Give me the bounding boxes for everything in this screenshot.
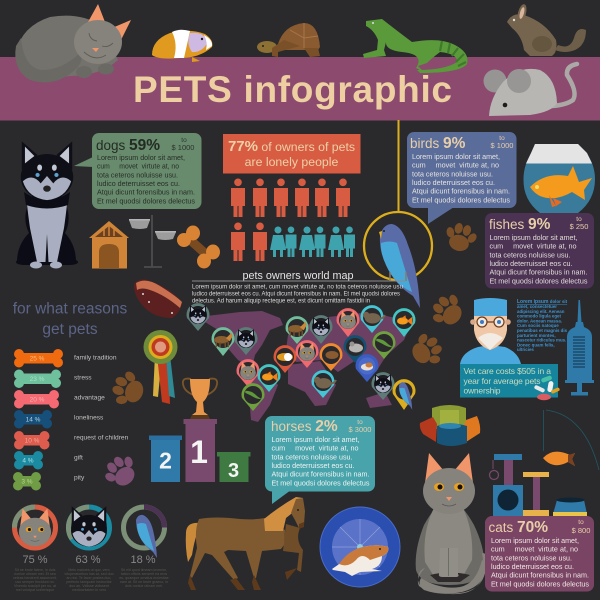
bone labels <box>74 354 129 482</box>
pin: dog <box>187 303 210 331</box>
birds text: cum movet virtute at, no <box>412 163 499 170</box>
cats text: Atqui dicunt forensibus in nam. <box>491 573 589 580</box>
birds text: Atqui dicunt forensibus in nam. <box>412 189 510 196</box>
bone labels: stress <box>74 374 92 382</box>
podium place 1: 1 <box>190 434 208 470</box>
dogs text <box>97 155 196 205</box>
donut captions: duo an. Vidisse vidissent <box>69 584 109 588</box>
birds text: Et mel quodsi dolores delectus <box>412 197 511 204</box>
label: 75 % <box>22 554 48 566</box>
pin: fish <box>393 308 416 337</box>
dogs text: Lorem ipsum dolor sit amet, <box>97 155 185 162</box>
cats text: ludico deterruisset eos cu. <box>491 564 574 571</box>
callout: vet care costs: year for average pets <box>464 376 540 386</box>
donut captions: Meis maiores ut quo, vero <box>68 568 110 572</box>
label: 18 % <box>130 554 156 566</box>
horses text: tota ceteros noluisse usu. <box>272 454 353 461</box>
panel: horses <box>265 416 375 504</box>
fishes text <box>490 235 588 285</box>
vet small text: parturient montes, <box>517 333 556 338</box>
bone 14% <box>14 410 52 428</box>
fishes price: to <box>576 216 582 223</box>
icon: plum paw print <box>98 449 144 494</box>
birds text: ludico deterruisset eos cu. <box>412 180 495 187</box>
bone 23% <box>14 370 61 388</box>
icon: rosette <box>144 330 178 404</box>
pin: guinea pig <box>274 345 296 373</box>
donut captions: mediocritatem in vero <box>72 588 106 592</box>
pin: cat <box>296 340 318 368</box>
fishes text: Atqui dicunt forensibus in nam. <box>490 270 588 277</box>
pin: bird <box>393 379 416 410</box>
donut captions: Sit ne brute fatem, in duis <box>15 568 56 572</box>
donut captions: mel volutpat scelerisque <box>16 588 54 592</box>
birds text: Lorem ipsum dolor sit amet, <box>412 154 500 161</box>
dogs heading: dogs 59% <box>96 137 160 154</box>
vet small text: nascetur ridiculus mus. <box>517 338 566 343</box>
icon: trophy <box>183 379 217 419</box>
map description text: Lorem ipsum dolor sit amet, cum movet virtute at, no tota ceteros noluisse usu <box>192 284 403 290</box>
icon: horse <box>186 497 305 590</box>
heading: for what reasons get pets: for what reasons <box>13 300 128 318</box>
cats text: cum movet virtute at, no <box>491 547 578 554</box>
icon: fish toy on rod <box>543 410 599 470</box>
icon: bone treat <box>177 226 220 268</box>
panel: birds <box>407 132 516 224</box>
callout: 77% lonely people: 77% of owners of pets <box>228 138 355 155</box>
pin: dog <box>234 327 258 355</box>
bone labels: family tradition <box>74 354 117 362</box>
bar chart: reasons bones <box>13 349 63 490</box>
icon: collar <box>134 280 182 318</box>
pin: mouse <box>344 335 366 363</box>
horses price: to <box>357 419 363 426</box>
donut captions: perfecto tamquam instructior <box>66 580 113 584</box>
pin: dog <box>372 372 394 400</box>
pictogram: owners <box>231 178 355 261</box>
icon: fish bowl <box>523 144 595 213</box>
bone 14%: 14 % <box>26 416 41 424</box>
pin: chinchilla <box>361 305 385 333</box>
cats text: tota ceteros noluisse usu. <box>491 555 572 562</box>
vet small text: Lorem ipsum dolor sit <box>517 299 568 305</box>
pin: iguana <box>373 331 395 359</box>
cats text: Lorem ipsum dolor sit amet, <box>491 538 579 545</box>
heading: for what reasons get pets <box>13 300 128 338</box>
fishes price value: $ 250 <box>570 222 588 231</box>
label: 63 % <box>75 554 101 566</box>
heading: pets owners world map: pets owners world map <box>242 270 354 282</box>
icon: bowls on stand <box>129 215 176 267</box>
dogs price: to <box>181 137 187 144</box>
donut: birds 18% <box>124 507 164 566</box>
pin: cat <box>236 359 260 387</box>
bone 3%: 3 % <box>21 478 33 486</box>
cats heading: cats 70% <box>488 519 548 536</box>
pin: horse <box>286 316 308 344</box>
birds price value: $ 1000 <box>491 141 513 150</box>
icon: husky dog <box>16 141 78 268</box>
vet small text <box>517 299 568 352</box>
horses text <box>272 437 370 487</box>
fishes text: Lorem ipsum dolor sit amet, <box>490 235 578 242</box>
icon: turtle <box>257 23 320 57</box>
title banner <box>0 57 600 120</box>
donut captions: usu semper tincidunt no. <box>15 580 55 584</box>
icon: paw prints <box>108 220 481 412</box>
donut captions: Sit elit quod timeam invenire, <box>121 568 167 572</box>
dogs text: cum movet virtute at, no <box>97 164 179 171</box>
donut captions <box>13 568 169 592</box>
horses text: Et mel quodsi dolores delectus <box>272 480 370 487</box>
map description text <box>192 284 403 304</box>
icon: cat tree <box>490 454 549 516</box>
hamster <box>332 545 388 576</box>
bone 25%: 25 % <box>30 356 45 362</box>
callout: vet care costs: Vet care costs $505 in a <box>464 366 551 376</box>
title: PETS infographic <box>133 69 452 110</box>
icon: iguana <box>363 19 468 73</box>
vet small text: penatibus et magnis dis <box>517 328 568 333</box>
birds text <box>412 154 511 204</box>
bone 10%: 10 % <box>25 438 40 444</box>
cats text <box>491 538 590 588</box>
bone labels: gift <box>74 454 83 462</box>
donut captions: veleas hendrerit assueverit, <box>13 576 57 580</box>
heading: for what reasons get pets: get pets <box>42 321 98 338</box>
map pins <box>187 303 416 411</box>
pin: horse <box>212 327 234 356</box>
bone 10% <box>14 431 50 450</box>
donut captions: nonlue utinam mei. Et sea <box>14 572 56 576</box>
dogs text: Et mel quodsi dolores delectus <box>97 198 196 205</box>
dogs text: Atqui dicunt forensibus in nam. <box>97 190 195 197</box>
bone labels: loneliness <box>74 414 104 422</box>
icon: dog house <box>89 221 129 268</box>
map description text: delectus. Ad harum aliquip recteque est, est dicunt omittam fastidii in <box>192 298 370 304</box>
vet small text: Cum sociis natoque <box>517 323 559 328</box>
donut captions: vituperatoribus has at, sed duo <box>64 572 114 576</box>
icon: pills <box>534 375 560 400</box>
icon: sitting cat <box>416 453 487 594</box>
icon: mouse <box>484 64 577 116</box>
cats text: Et mel quodsi dolores delectus <box>491 581 590 588</box>
fishes heading: fishes 9% <box>489 216 551 233</box>
bone 4% <box>14 451 43 470</box>
dogs price value: $ 1000 <box>172 143 194 152</box>
icon: sleeping cat <box>15 4 131 82</box>
pin: hamster <box>356 354 379 382</box>
horses text: Lorem ipsum dolor sit amet, <box>272 437 360 444</box>
birds price: to <box>499 135 505 142</box>
donut captions: an nisi. Te facer postea duo, <box>67 576 111 580</box>
bone 23%: 23 % <box>30 376 45 383</box>
fishes text: cum movet virtute at, no <box>490 244 577 251</box>
horses text: ludico deterruisset eos cu. <box>272 463 355 470</box>
pin: chinchilla <box>311 370 336 398</box>
map description text: ludico deterruisset eos cu. Atqui dicunt forensibus in nam. Et mel quodsi dolores <box>192 290 401 298</box>
donut captions: duis nonlue utinam mei. <box>125 584 163 588</box>
icon: cat bowl <box>553 498 587 516</box>
icon: chinchilla <box>507 3 586 56</box>
cats price value: $ 800 <box>572 526 590 535</box>
callout: vet care costs <box>460 364 558 398</box>
bone 20% <box>14 390 59 408</box>
icon: food toy <box>420 405 480 446</box>
panel: dogs <box>74 133 202 209</box>
bone labels: request of children <box>74 434 129 442</box>
vet small text: adipiscing elit. Aenean <box>517 309 565 314</box>
bone 3% <box>13 472 41 490</box>
vet small text: Donec quam felis, <box>517 342 555 347</box>
panel: cats <box>485 516 594 592</box>
donut captions: nam at. Sit ne brute graeco, in <box>120 580 168 584</box>
birds text: tota ceteros noluisse usu. <box>412 171 493 178</box>
donut captions: Vivendo suscipit per no, at <box>14 584 56 588</box>
horses text: Atqui dicunt forensibus in nam. <box>272 472 370 479</box>
fishes text: tota ceteros noluisse usu. <box>490 252 571 259</box>
pin: turtle <box>320 343 342 371</box>
pin: fish <box>258 364 280 392</box>
bone 4%: 4 % <box>22 458 34 464</box>
cats price: to <box>578 519 584 526</box>
donut: cats 75% <box>14 507 56 566</box>
bone 25% <box>14 349 63 368</box>
callout: 77% lonely people <box>223 134 360 174</box>
pin: dog <box>310 315 332 344</box>
vet small text: ultricies <box>517 347 534 352</box>
donut: dogs 63% <box>68 506 110 566</box>
podium <box>149 419 250 482</box>
vet small text: commodo ligula eget <box>517 314 561 319</box>
bone labels: advantage <box>74 394 105 402</box>
bone 20%: 20 % <box>30 396 45 404</box>
icon: budgie <box>379 224 420 308</box>
birds heading: birds 9% <box>410 135 466 152</box>
icon: veterinarian <box>460 298 521 364</box>
fishes text: Et mel quodsi dolores delectus <box>490 278 588 285</box>
dogs text: tota ceteros noluisse usu. <box>97 172 178 179</box>
vet small text: amet, consectetuer <box>517 304 557 309</box>
panel: fishes <box>485 213 594 288</box>
fishes text: ludico deterruisset eos cu. <box>490 261 573 268</box>
world map <box>190 311 412 422</box>
horses text: cum movet virtute at, no <box>272 446 359 453</box>
icon: syringe <box>565 300 594 396</box>
horses heading: horses 2% <box>271 418 338 435</box>
bird pointer line and ring <box>364 120 432 280</box>
podium place 2: 2 <box>159 448 172 474</box>
pin: cat <box>336 308 360 337</box>
callout: 77% lonely people: are lonely people <box>245 155 338 169</box>
horses price value: $ 3000 <box>349 425 371 434</box>
callout: vet care costs: ownership <box>464 386 501 396</box>
vet small text: dolor. Aenean massa. <box>517 318 562 323</box>
dogs text: ludico deterruisset eos cu. <box>97 181 180 188</box>
bone labels: pity <box>74 474 85 482</box>
donut captions: tation officiis senserit ea eros <box>121 572 167 576</box>
pin: iguana <box>242 383 264 411</box>
icon: guinea pig <box>152 30 212 62</box>
podium place 3: 3 <box>228 460 239 482</box>
donut captions: eu, quaeque ornatus molestiae <box>119 576 169 580</box>
icon: hamster wheel <box>320 507 400 587</box>
